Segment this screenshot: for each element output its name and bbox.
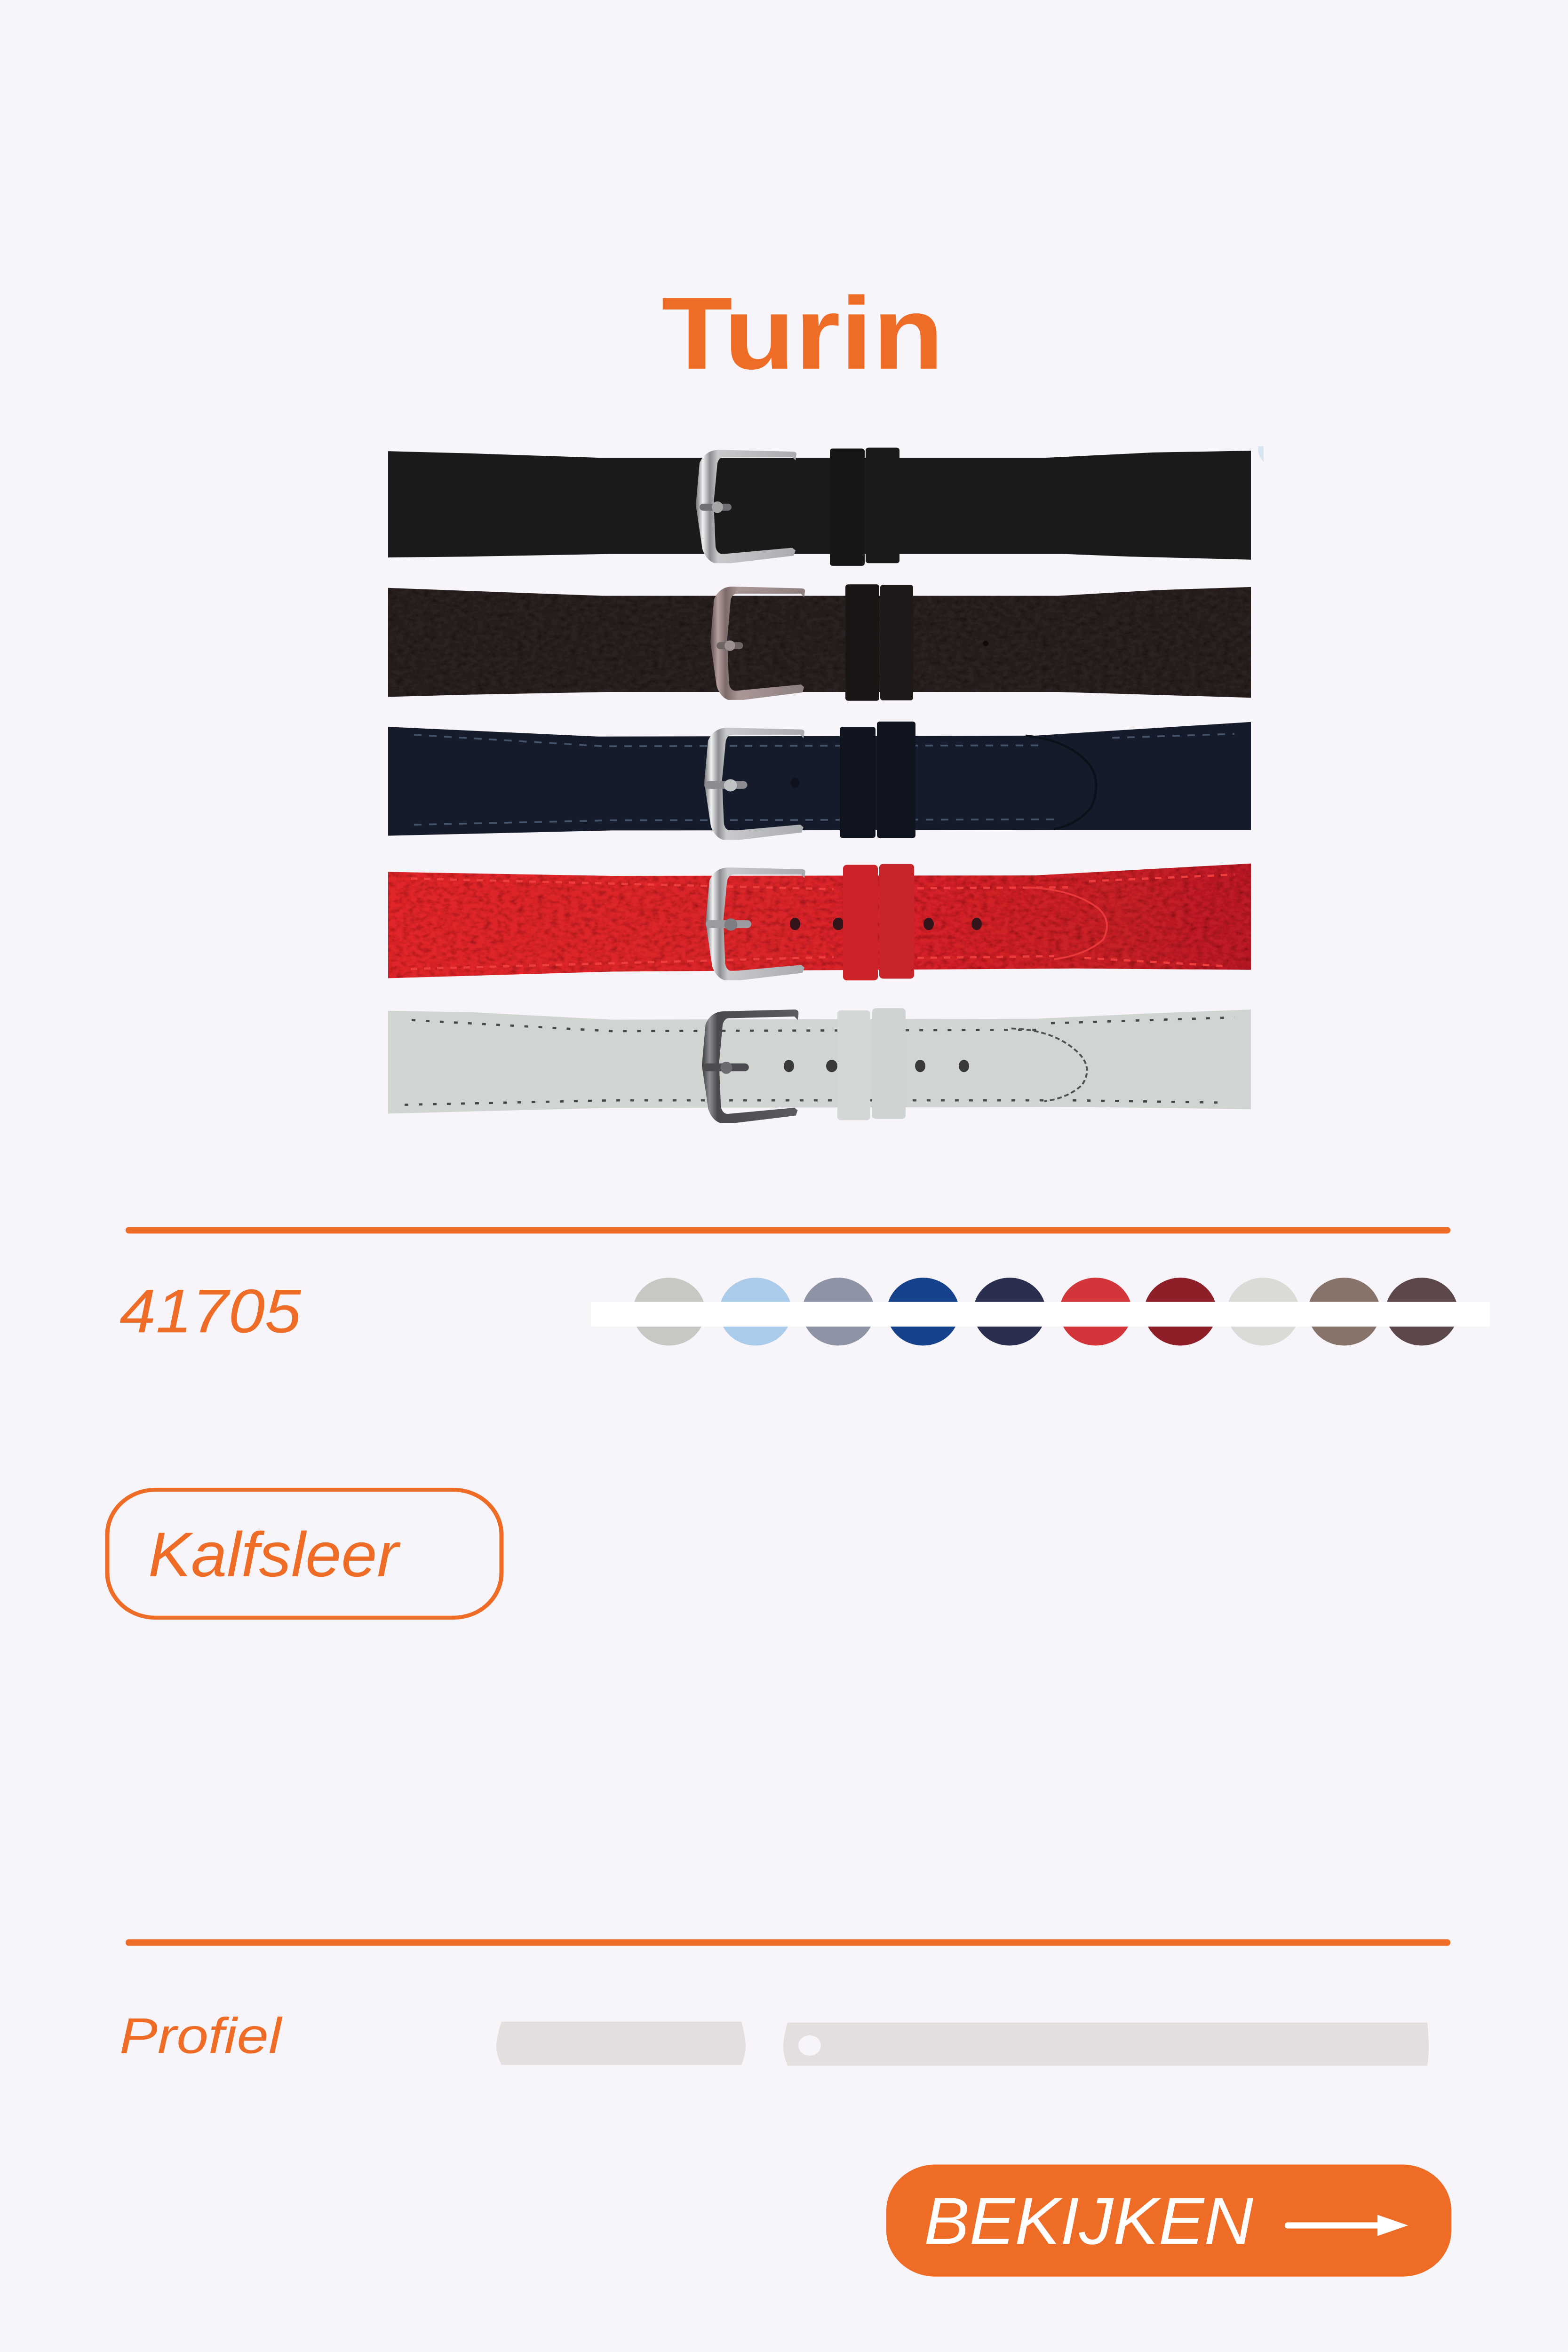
- swatch: burgundy: [1144, 1278, 1217, 1345]
- tag outline: [107, 1490, 501, 1618]
- profile bar: long: [783, 2023, 1429, 2066]
- article number: 41705: [119, 1276, 302, 1345]
- profile label: Profiel: [119, 2008, 283, 2064]
- swatch: taupe: [1308, 1278, 1380, 1345]
- strap: light grey: [388, 1008, 1251, 1123]
- swatch: royal blue: [887, 1278, 959, 1345]
- strap: red: [388, 864, 1251, 980]
- swatch: grey: [633, 1278, 705, 1345]
- swatch: red: [1059, 1278, 1132, 1345]
- tag label: Kalfsleer: [148, 1520, 401, 1590]
- swatch: blue grey: [802, 1278, 875, 1345]
- material tag: [107, 1490, 501, 1618]
- swatch: dark brown: [1385, 1278, 1458, 1345]
- strap: dark brown: [388, 584, 1251, 701]
- product photo: five watch straps: [388, 446, 1264, 1123]
- button label: BEKIJKEN: [924, 2185, 1253, 2258]
- white band over swatches: [591, 1302, 1490, 1327]
- icon: arrow: [1285, 2215, 1408, 2236]
- strap: navy: [388, 722, 1251, 840]
- swatch: light grey: [1227, 1278, 1299, 1345]
- button: [886, 2165, 1451, 2277]
- swatch: navy: [973, 1278, 1046, 1345]
- divider: top rule: [126, 1227, 1450, 1233]
- strap: black: [388, 446, 1264, 566]
- divider: bottom rule: [126, 1939, 1450, 1946]
- button background: [886, 2165, 1451, 2277]
- colour swatches: [591, 1278, 1490, 1345]
- profile diagram: [496, 2022, 1429, 2066]
- title: Turin: [661, 276, 944, 390]
- profile bar hole: [798, 2035, 821, 2056]
- profile bar: short: [496, 2022, 746, 2065]
- swatch: light blue: [719, 1278, 792, 1345]
